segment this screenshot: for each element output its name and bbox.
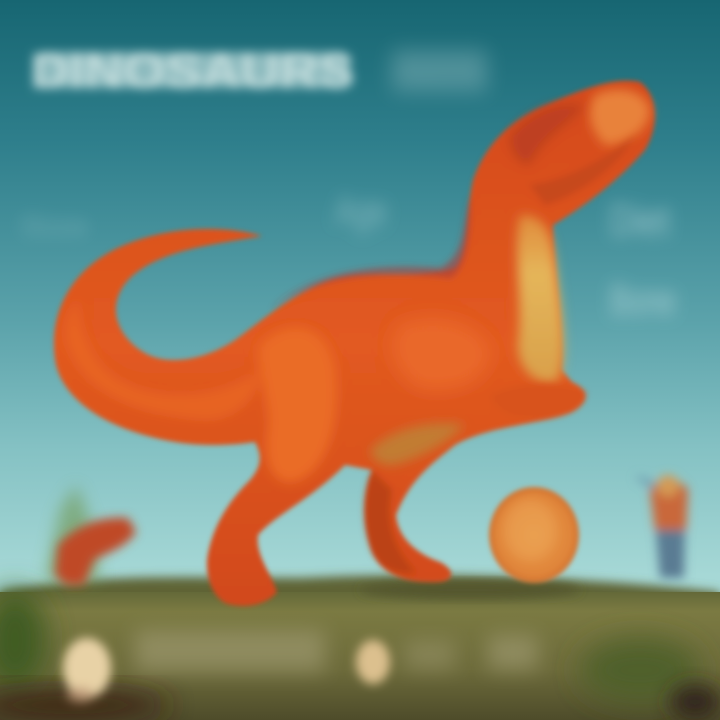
bottom icon: left egg bbox=[63, 638, 111, 703]
bottom icon: centre egg bbox=[356, 640, 390, 684]
sky label: centre: Age bbox=[335, 187, 387, 234]
sky label: right lower: Bone bbox=[610, 276, 676, 325]
bottom text right bbox=[488, 635, 538, 671]
small dinosaur left bbox=[55, 518, 136, 585]
far leg shade bbox=[364, 470, 415, 573]
back shadow bbox=[270, 195, 470, 310]
tail shading bbox=[68, 300, 262, 420]
bottom text left: Dino Eggs bbox=[135, 636, 325, 669]
arm bbox=[490, 383, 585, 418]
subtitle: FACTS bbox=[392, 57, 487, 88]
belly lower bbox=[370, 423, 465, 465]
sky label: left: Size bbox=[20, 211, 88, 241]
title: DINOSAURS bbox=[30, 43, 355, 99]
head highlight bbox=[590, 90, 650, 145]
torso highlight bbox=[393, 319, 490, 390]
jaw line bbox=[530, 135, 635, 205]
child figure bbox=[635, 475, 688, 578]
plant left bbox=[45, 485, 100, 580]
dinosaur body silhouette bbox=[54, 81, 655, 606]
sky label: right upper: Diet bbox=[610, 196, 670, 245]
rear thigh bbox=[259, 328, 336, 482]
bottom text left bbox=[135, 630, 325, 672]
belly and throat bbox=[517, 215, 564, 382]
ground bbox=[0, 575, 720, 720]
main dinosaur bbox=[54, 81, 655, 606]
head shadow bbox=[510, 104, 585, 165]
bottom text centre: Nest bbox=[405, 644, 455, 671]
bottom text right: Fossil bbox=[488, 641, 538, 671]
egg bbox=[489, 487, 579, 583]
